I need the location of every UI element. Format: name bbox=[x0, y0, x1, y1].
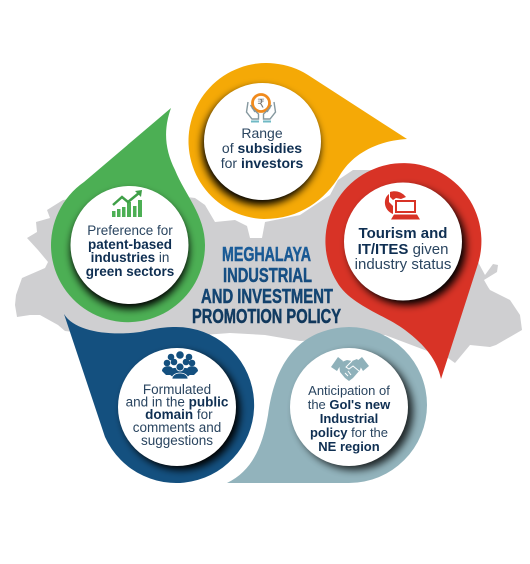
panel: public domain bbox=[64, 314, 254, 483]
text: patent-based industries: green sectors bbox=[86, 264, 174, 279]
text: public domain: comments and bbox=[133, 420, 221, 435]
icon: rupee in hands: ₹ bbox=[257, 96, 265, 110]
text: public domain: Formulated bbox=[143, 382, 211, 397]
text: range of subsidies: of subsidies bbox=[222, 140, 302, 156]
text: GoI new industrial policy: Industrial bbox=[320, 411, 378, 426]
text: public domain: and in the public bbox=[126, 394, 228, 410]
text: patent-based industries: patent-based bbox=[88, 237, 172, 252]
panel: range of subsidies bbox=[188, 63, 407, 219]
icon: group of people bbox=[162, 351, 198, 379]
map of Meghalaya bbox=[15, 170, 522, 363]
title: PROMOTION POLICY bbox=[192, 305, 341, 328]
title: INDUSTRIAL bbox=[223, 264, 312, 287]
icon: handshake bbox=[331, 357, 369, 381]
panel: tourism and IT bbox=[325, 163, 481, 379]
icon: growth chart bbox=[112, 190, 142, 217]
text: range of subsidies: Range bbox=[241, 125, 283, 141]
title: MEGHALAYA bbox=[222, 243, 311, 266]
icon: rupee in hands bbox=[246, 94, 276, 122]
text: GoI new industrial policy: the GoI's new bbox=[308, 397, 390, 412]
text: patent-based industries: industries in bbox=[91, 250, 169, 265]
text: range of subsidies: for investors bbox=[221, 155, 303, 171]
text: patent-based industries: Preference for bbox=[87, 223, 173, 238]
text: GoI new industrial policy: NE region bbox=[318, 439, 380, 454]
title: AND INVESTMENT bbox=[201, 285, 333, 308]
icon: globe and laptop bbox=[385, 191, 420, 220]
panel: patent-based industries bbox=[51, 108, 205, 322]
panel: GoI new industrial policy bbox=[227, 327, 427, 483]
text: public domain: domain for bbox=[145, 407, 213, 422]
text: public domain: suggestions bbox=[141, 433, 213, 448]
text: tourism and IT/ITES: IT/ITES given bbox=[358, 241, 448, 258]
text: tourism and IT/ITES: Tourism and bbox=[359, 225, 447, 242]
infographic bbox=[15, 63, 522, 483]
text: GoI new industrial policy: policy for the bbox=[310, 425, 388, 440]
text: tourism and IT/ITES: industry status bbox=[355, 256, 451, 273]
title bbox=[192, 243, 341, 328]
text: GoI new industrial policy: Anticipation of bbox=[308, 383, 390, 398]
